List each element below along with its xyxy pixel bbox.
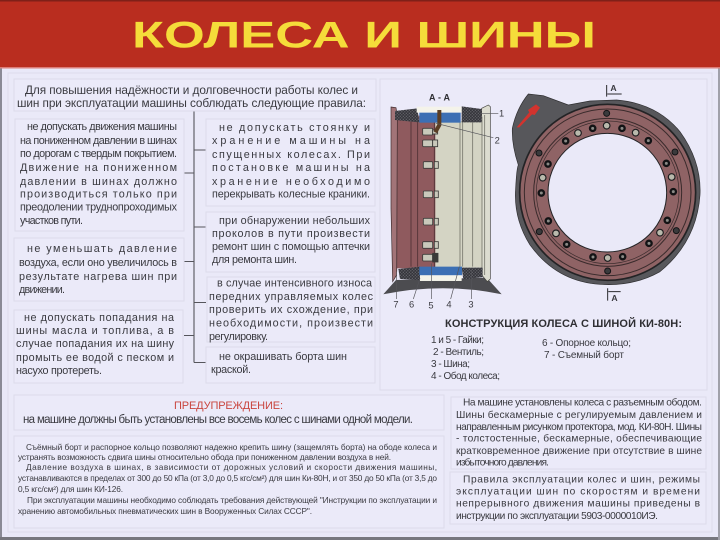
callout numbers: 3	[468, 299, 474, 309]
legend column one	[431, 335, 500, 382]
rule: parking: спущенных колесах. При	[212, 149, 370, 161]
panel: wheel description: кратковременное движение при отсутствие в шине	[456, 446, 702, 457]
flange	[392, 116, 435, 268]
rule: parking	[206, 119, 375, 206]
section mark bottom	[608, 288, 621, 303]
rim	[520, 104, 696, 280]
right rim	[482, 105, 490, 282]
valve	[435, 110, 439, 132]
rule: wear: необходимости, произвести	[209, 318, 373, 330]
rule: punctures: для ремонта шин.	[212, 254, 297, 266]
rule: wear: в случае интенсивного износа	[217, 278, 372, 290]
panel: mounting and pressure notes: устанавливаются в пределах от 300 до 50 кПа (от 3,0 до 0,5 кгс/см²) для шин Ки-80Н, и от 350 до 50 кПа (от 3,5 до	[18, 473, 437, 483]
legend column one: 3 - Шина;	[431, 359, 470, 370]
rule: low pressure driving: преодолении труднопроходимых	[20, 202, 178, 214]
panel: wheel description: Шины бескамерные с регулируемым давлением и	[456, 409, 702, 421]
rule: parking: постановке машины на	[212, 162, 370, 174]
rule: low pressure driving: участков пути.	[20, 215, 83, 227]
callout numbers: 1	[499, 108, 504, 118]
legend column one: 1 и 5 - Гайки;	[431, 335, 484, 346]
legend column two: 7 - Съемный борт	[544, 349, 624, 361]
bolts	[423, 128, 438, 262]
front view of wheel	[512, 83, 700, 303]
leader lines	[397, 113, 498, 299]
title: КОЛЕСА И ШИНЫ	[132, 14, 596, 56]
rule: oil and fuel: шины масла и топлива, а в	[16, 325, 174, 337]
warning text: на машине должны быть установлены все восемь колес с шинами одной модели.	[23, 414, 413, 426]
section mark bottom: А	[611, 293, 618, 303]
rule: wear: проверить их схождение, при	[209, 304, 373, 316]
rule: parking: перекрывать колесные краники.	[212, 188, 370, 200]
panel: wheel description: направленным рисунком протектора, мод. КИ-80Н. Шины	[456, 422, 702, 433]
panel: mounting and pressure notes: Давление воздуха в шинах, в зависимости от дорожных условий и скорости движения машины,	[26, 462, 437, 472]
intro text block: шин при эксплуатации машины соблюдать следующие правила:	[17, 96, 366, 110]
red arrow icon	[517, 104, 540, 127]
rule: oil and fuel: насухо протереть.	[16, 365, 102, 377]
road surface	[383, 278, 502, 294]
callout numbers: 6	[409, 299, 414, 309]
rule: low pressure driving: по дорогам с твердым покрытием.	[20, 148, 177, 160]
legend column one: 4 - Обод колеса;	[431, 370, 500, 382]
panel: mounting and pressure notes: 0,5 кгс/см²) для шин КИ-126.	[18, 484, 123, 494]
rule: wear: регулировку.	[209, 331, 268, 343]
rule: punctures: при обнаружении небольших	[219, 215, 371, 227]
intro text block	[14, 79, 376, 111]
panel: wheel diagram	[380, 79, 707, 390]
panel: warning	[14, 395, 444, 430]
rule: oil and fuel: случае попадания их на шину	[16, 338, 175, 350]
panel: rules	[14, 79, 376, 383]
section label: А - А	[429, 93, 450, 103]
callout numbers: 4	[446, 299, 452, 309]
rule: low pressure driving: давлении в шинах должно	[20, 176, 177, 188]
rule: low pressure driving: на пониженном давлении в шинах	[20, 135, 178, 147]
panel: wheel description: На машине установлены колеса с разъемным ободом.	[463, 396, 702, 408]
bolt holes: dark	[539, 126, 676, 260]
panel: operating rules reference	[450, 472, 706, 524]
outer bolts	[536, 110, 679, 274]
tire silhouette	[512, 94, 700, 285]
panel: operating rules reference: непрерывного движения машины приведены в	[456, 498, 700, 510]
rule: wear: передних управляемых колес	[209, 291, 374, 303]
rule: do not reduce pressure: не уменьшать давление	[27, 243, 177, 255]
intro text block: Для повышения надёжности и долговечности работы колес и	[25, 83, 358, 97]
panel: mounting and pressure notes	[14, 436, 444, 528]
warning heading: ПРЕДУПРЕЖДЕНИЕ:	[174, 400, 283, 412]
rule: punctures: ремонт шин с помощью аптечки	[212, 241, 370, 253]
rule: do not reduce pressure: воздуха, если оно увеличилось в	[19, 257, 177, 269]
bolt holes: light	[539, 122, 675, 261]
rule: wear	[207, 277, 375, 343]
callout numbers: 7	[393, 299, 399, 309]
panel: wheel description: избыточного давления.	[456, 456, 549, 468]
panel: mounting and pressure notes: Съёмный борт и распорное кольцо позволяют надежно крепить шину (защемлять борта) на ободе колеса и	[26, 442, 437, 452]
rule: paint: краской.	[211, 364, 251, 376]
callout numbers	[393, 108, 504, 310]
diagram caption: КОНСТРУКЦИЯ КОЛЕСА С ШИНОЙ КИ-80Н:	[445, 317, 682, 330]
legend column two	[542, 338, 631, 361]
rule: do not reduce pressure: движении.	[19, 284, 65, 296]
rule: oil and fuel: промыть ее водой с песком и	[16, 352, 174, 364]
panel: wheel description	[451, 396, 706, 469]
rule: parking: хранение необходимо	[212, 176, 370, 188]
tire sections	[395, 108, 419, 122]
section view A-A	[383, 93, 504, 310]
panel: wheel description: - толстостенные, бескамерные, обеспечивающие	[456, 432, 702, 444]
connector lines	[184, 111, 206, 362]
callout numbers: 5	[428, 300, 434, 310]
callout numbers: 2	[495, 135, 500, 145]
rule: low pressure driving	[15, 119, 184, 231]
section mark top	[607, 83, 622, 97]
hub opening	[548, 133, 667, 252]
rule: low pressure driving: Движение на пониженном	[20, 162, 177, 174]
section mark top: А	[610, 83, 617, 93]
rule: parking: не допускать стоянку и	[219, 122, 370, 134]
rule: do not reduce pressure	[14, 238, 184, 301]
rule: do not reduce pressure: результате нагрева шин при	[19, 271, 177, 283]
rim body	[435, 121, 482, 268]
legend column one: 2 - Вентиль;	[433, 347, 484, 358]
panel: mounting and pressure notes: При эксплуатации машины необходимо соблюдать требования действующей "Инструкции по эксплуатации и	[27, 495, 437, 505]
panel: operating rules reference: инструкции по эксплуатации 5903-0000010ИЭ.	[456, 511, 658, 522]
rule: oil and fuel	[14, 310, 183, 383]
rule: paint	[206, 347, 375, 383]
rule: paint: не окрашивать борта шин	[219, 351, 347, 363]
header band	[0, 0, 720, 68]
rule: low pressure driving: производиться только при	[20, 188, 177, 200]
panel: operating rules reference: Правила эксплуатации колес и шин, режимы	[463, 474, 700, 486]
rule: oil and fuel: не допускать попадания на	[24, 312, 174, 324]
panel: operating rules reference: эксплуатации шин по скоростям и времени	[456, 486, 700, 498]
legend column two: 6 - Опорное кольцо;	[542, 338, 631, 349]
rule: punctures: проколов в пути произвести	[212, 228, 370, 240]
rule: parking: хранение машины на	[212, 135, 370, 147]
rule: low pressure driving: не допускать движения машины	[27, 121, 177, 133]
panel: mounting and pressure notes: хранению автомобильных пневматических шин в Вооруженных Силах СССР".	[18, 506, 312, 516]
rule: punctures	[206, 212, 375, 272]
panel: mounting and pressure notes: устранять возможность сдвига шины относительно обода при пониженном давлении воздуха в ней.	[18, 452, 391, 462]
